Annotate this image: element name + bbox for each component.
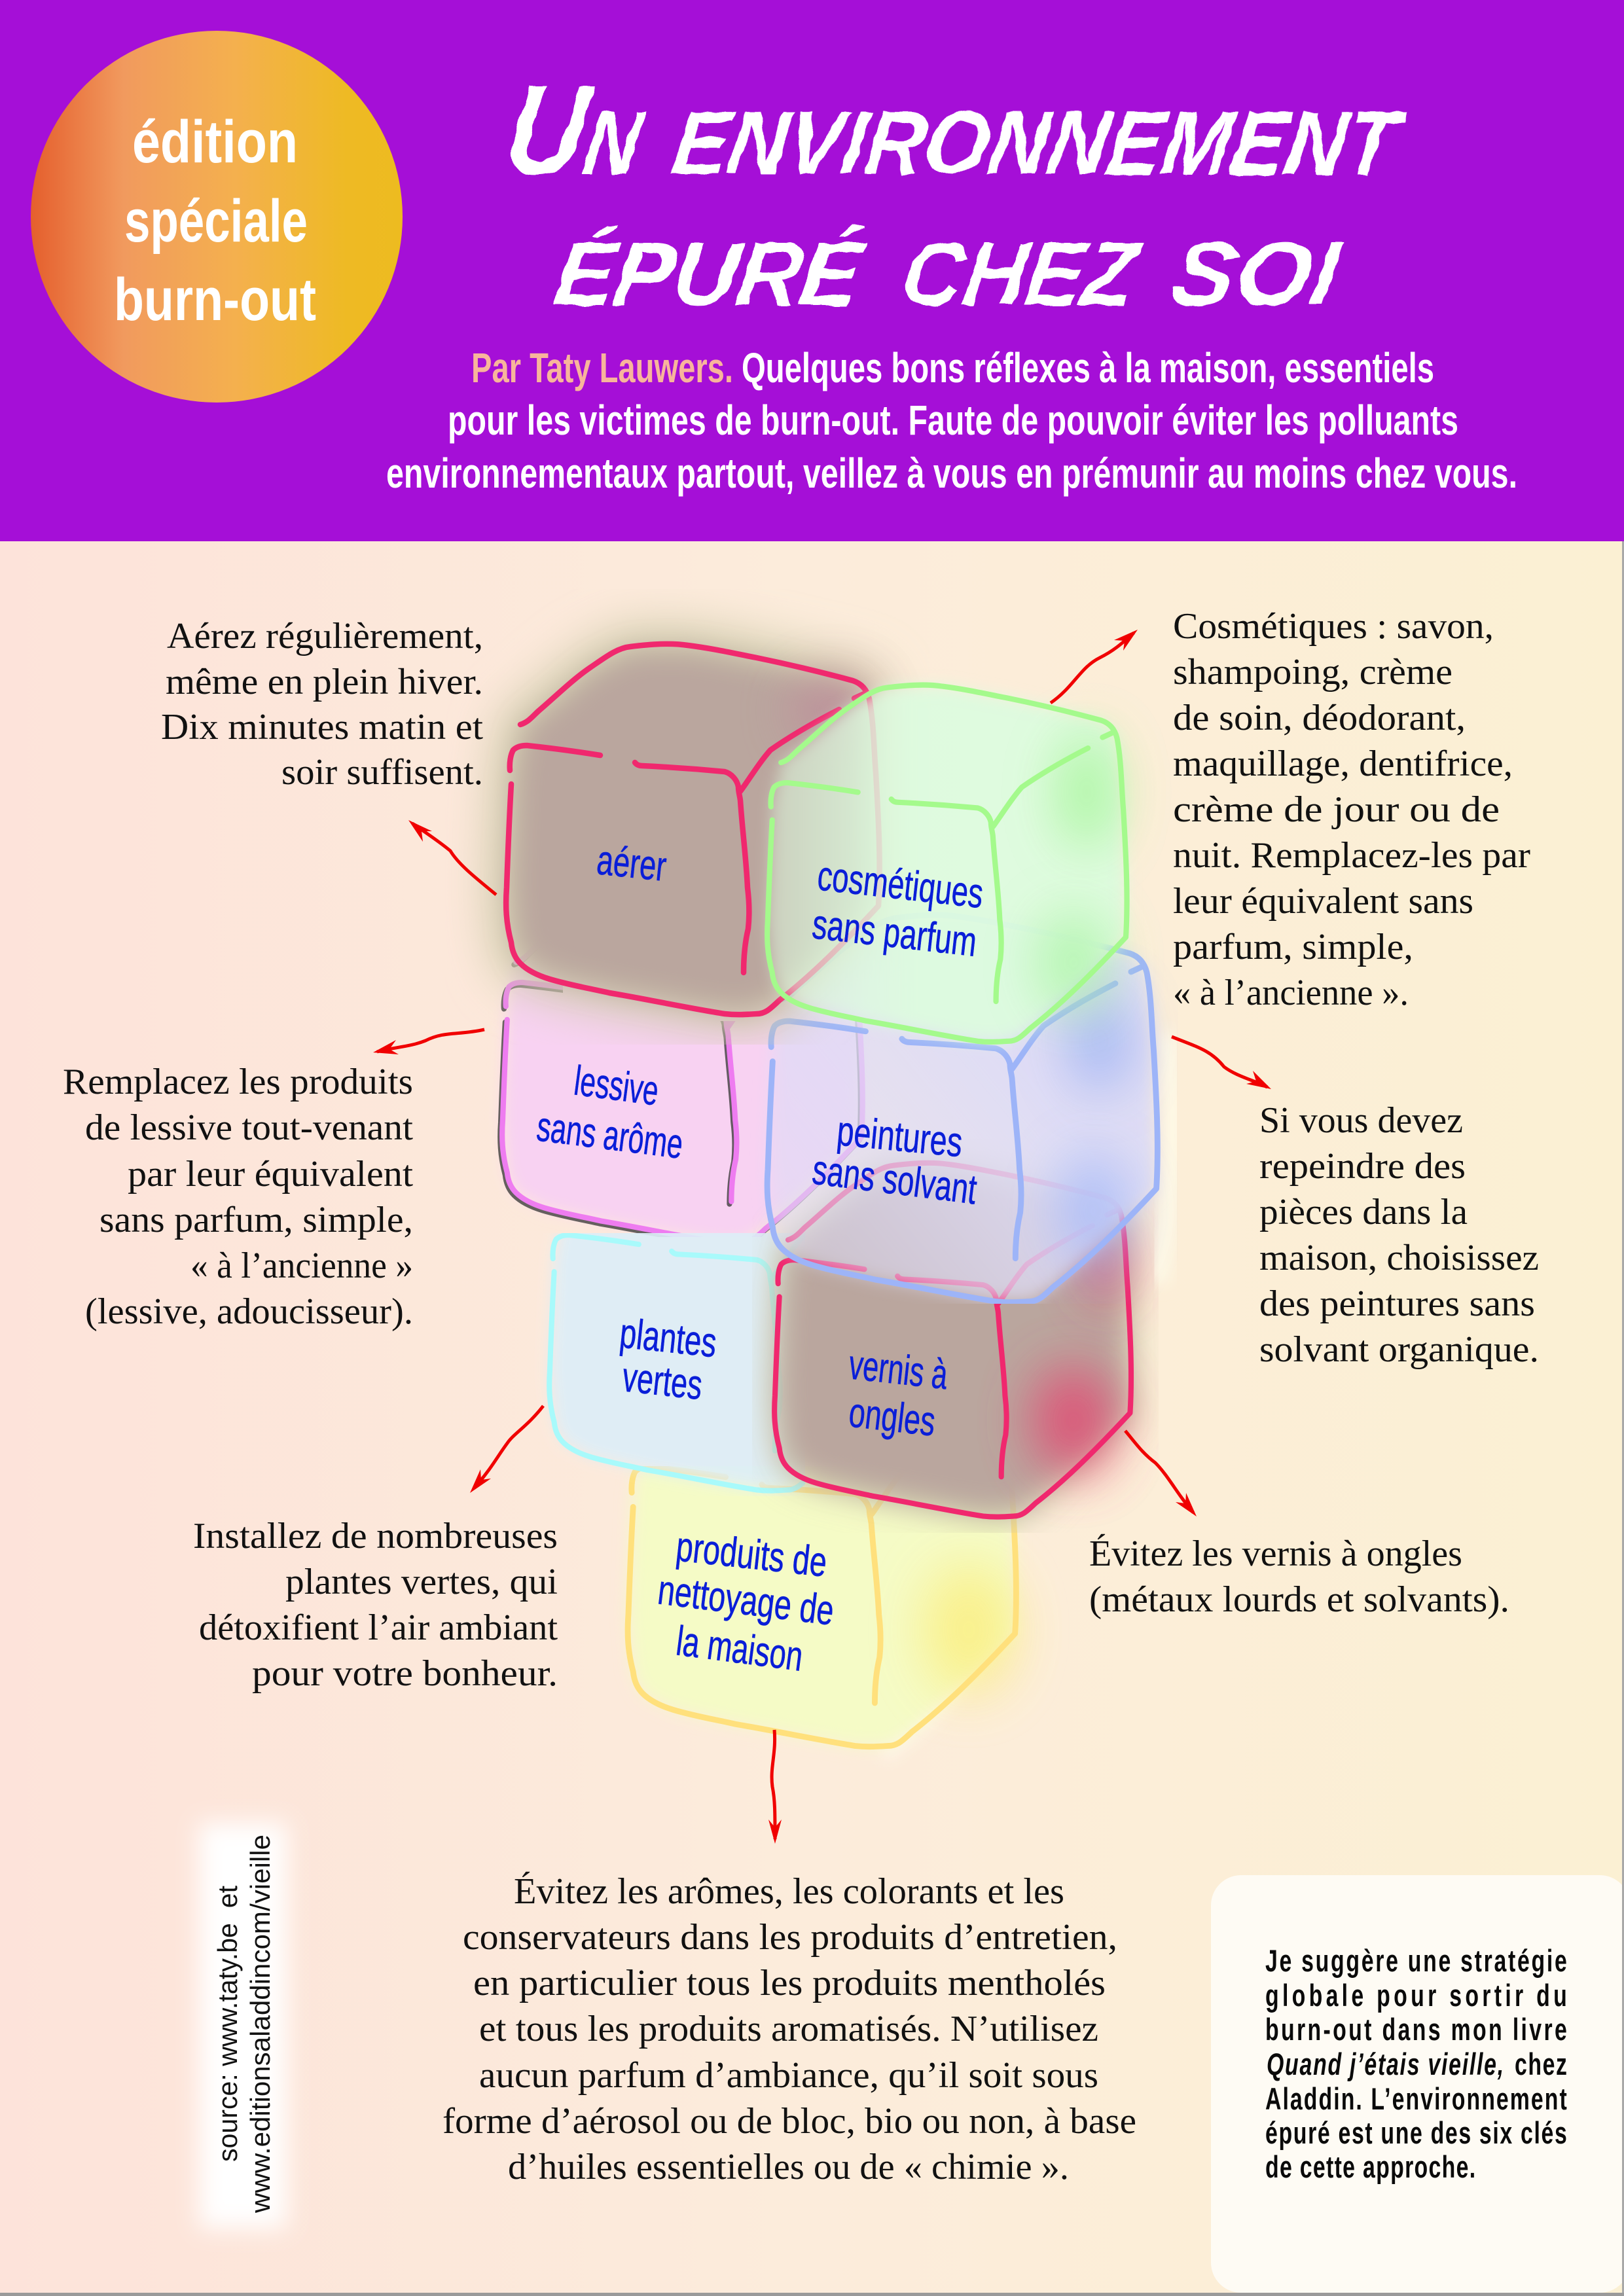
badge: édition spéciale burn-out <box>31 31 403 403</box>
text: produits de nettoyage: conservateurs dans les produits d’entretien, <box>463 1917 1117 1958</box>
text: lessive: Remplacez les produits <box>63 1062 413 1102</box>
text: peintures <box>1259 1100 1539 1370</box>
text: produits de nettoyage <box>442 1871 1136 2187</box>
cube: aérer: aérer <box>595 836 668 890</box>
cube: produits de nettoyage: la maison <box>674 1617 806 1680</box>
text: cosmétiques: nuit. Remplacez-les par <box>1173 835 1530 876</box>
cube: produits de nettoyage <box>624 1466 1043 1751</box>
callout: book: Quand j’étais vieille, <box>1267 2047 1504 2081</box>
text: cosmétiques: « à l’ancienne ». <box>1173 973 1409 1013</box>
arrow: peintures <box>1172 1037 1271 1089</box>
text: vernis: Évitez les vernis à ongles <box>1089 1534 1462 1574</box>
text: produits de nettoyage: d’huiles essentielles ou de « chimie ». <box>508 2147 1069 2187</box>
text: peintures: pièces dans la <box>1259 1192 1468 1232</box>
intro text <box>386 344 1517 497</box>
cube: lessive sans arôme: sans arôme <box>534 1102 686 1168</box>
cube: vernis à ongles: vernis à <box>846 1340 950 1398</box>
text: lessive: (lessive, adoucisseur). <box>85 1291 413 1332</box>
cube: plantes vertes <box>546 1233 805 1496</box>
text: aérer: Aérez régulièrement, <box>167 616 483 656</box>
cube: cosmétiques sans parfum <box>767 685 1127 1042</box>
arrow: lessive <box>373 1030 484 1054</box>
callout: book: de cette approche. <box>1265 2150 1475 2184</box>
text: peintures: solvant organique. <box>1259 1329 1539 1370</box>
badge: édition spéciale burn-out: spéciale <box>124 188 308 255</box>
text: aérer: Dix minutes matin et <box>161 707 483 747</box>
arrow: plantes vertes <box>470 1406 543 1493</box>
text: aérer <box>161 616 483 793</box>
cube: peintures sans solvant: peintures <box>835 1107 965 1166</box>
cube: aérer <box>488 627 897 1032</box>
title: SOI <box>1164 224 1348 325</box>
title <box>496 60 1411 325</box>
source panel <box>199 1823 287 2229</box>
text: plantes <box>193 1516 558 1694</box>
callout: book: épuré est une des six clés <box>1265 2116 1567 2150</box>
text: aérer: même en plein hiver. <box>166 662 483 702</box>
text: plantes: détoxifient l’air ambiant <box>199 1607 558 1648</box>
title: ÉPURÉ <box>548 224 871 325</box>
arrow: aérer <box>408 820 496 895</box>
text: produits de nettoyage: Évitez les arômes, les colorants et les <box>514 1871 1064 1912</box>
text: cosmétiques: shampoing, crème <box>1173 652 1453 692</box>
text: cosmétiques <box>1173 606 1530 1013</box>
cube: cosmétiques sans parfum: cosmétiques <box>815 852 986 917</box>
text: cosmétiques: maquillage, dentifrice, <box>1173 744 1513 784</box>
intro text: Par Taty Lauwers. <box>471 344 733 391</box>
arrow: produits de nettoyage <box>768 1730 782 1844</box>
text: vernis: (métaux lourds et solvants). <box>1089 1579 1509 1620</box>
text: plantes: plantes vertes, qui <box>285 1562 558 1602</box>
text: vernis <box>1089 1534 1509 1620</box>
text: lessive <box>63 1062 413 1332</box>
text: peintures: repeindre des <box>1259 1146 1466 1187</box>
text: aérer: soir suffisent. <box>281 752 483 793</box>
text: produits de nettoyage: en particulier tous les produits mentholés <box>473 1963 1106 2003</box>
cube: produits de nettoyage: nettoyage de <box>655 1566 837 1634</box>
text: plantes: pour votre bonheur. <box>252 1653 558 1694</box>
text: cosmétiques: crème de jour ou de <box>1173 789 1500 830</box>
text: produits de nettoyage: aucun parfum d’ambiance, qu’il soit sous <box>479 2055 1098 2096</box>
badge: édition spéciale burn-out: édition <box>132 109 298 175</box>
cube: vernis à ongles <box>765 1154 1141 1526</box>
title: CHEZ <box>895 224 1147 325</box>
callout: book: Je suggère une stratégie <box>1265 1944 1567 1978</box>
callout: book: Aladdin. L’environnement <box>1265 2082 1567 2116</box>
title: UN <box>496 60 655 202</box>
text: plantes: Installez de nombreuses <box>193 1516 558 1556</box>
title: ENVIRONNEMENT <box>666 93 1411 194</box>
cube: peintures sans solvant <box>767 915 1172 1302</box>
text: lessive: de lessive tout-venant <box>85 1107 413 1148</box>
source panel: www.editionsaladdincom/vieille <box>245 1835 276 2214</box>
text: lessive: sans parfum, simple, <box>99 1200 413 1240</box>
callout: book: burn-out dans mon livre <box>1265 2013 1567 2047</box>
cube: vernis à ongles: ongles <box>846 1388 938 1445</box>
text: lessive: par leur équivalent <box>128 1154 413 1194</box>
text: cosmétiques: de soin, déodorant, <box>1173 698 1466 738</box>
badge: édition spéciale burn-out: burn-out <box>114 266 316 333</box>
cube: plantes vertes: plantes <box>618 1309 719 1366</box>
callout: book <box>1211 1875 1624 2293</box>
text: peintures: maison, choisissez <box>1259 1238 1539 1278</box>
text: peintures: des peintures sans <box>1259 1283 1535 1324</box>
text: lessive: « à l’ancienne » <box>190 1246 413 1286</box>
cube: cosmétiques sans parfum: sans parfum <box>810 900 979 965</box>
callout: book: chez <box>1515 2047 1567 2081</box>
text: produits de nettoyage: forme d’aérosol ou de bloc, bio ou non, à base <box>442 2101 1136 2142</box>
cube: plantes vertes: vertes <box>620 1353 705 1408</box>
header band <box>0 0 1624 541</box>
cube: lessive sans arôme: lessive <box>571 1056 661 1115</box>
source panel: source: www.taty.be et <box>212 1886 243 2162</box>
arrow: cosmétiques <box>1051 630 1138 703</box>
text: cosmétiques: leur équivalent sans <box>1173 881 1473 922</box>
text: peintures: Si vous devez <box>1259 1100 1463 1141</box>
cube: peintures sans solvant: sans solvant <box>810 1145 979 1213</box>
arrow: vernis <box>1125 1431 1197 1516</box>
text: produits de nettoyage: et tous les produits aromatisés. N’utilisez <box>479 2009 1098 2049</box>
callout: book: globale pour sortir du <box>1265 1979 1567 2013</box>
cube: lessive sans arôme <box>497 954 865 1237</box>
cube: produits de nettoyage: produits de <box>674 1522 829 1586</box>
text: cosmétiques: Cosmétiques : savon, <box>1173 606 1494 647</box>
text: cosmétiques: parfum, simple, <box>1173 927 1413 967</box>
